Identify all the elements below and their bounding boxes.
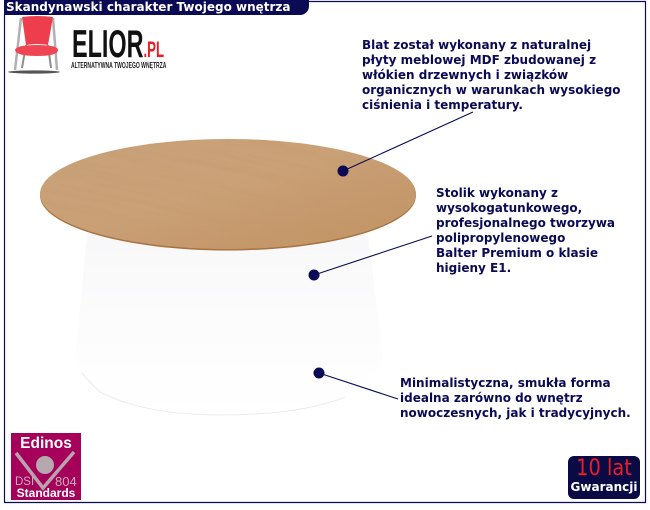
text: form description: Minimalistyczna, smukła forma [400, 376, 611, 390]
badge: 10 year warranty [568, 456, 640, 499]
badge standards label: Standards [17, 486, 75, 500]
badge 804 label: 804 [55, 474, 77, 489]
badge DSI label: DSI [15, 476, 34, 488]
text: table top description [362, 38, 621, 112]
text: table top description: Blat został wykonany z naturalnej [362, 38, 591, 52]
text: base description: Balter Premium o klasie [436, 246, 598, 260]
text: form description: idealna zarówno do wnętrz [400, 391, 583, 405]
product: round table [40, 112, 474, 416]
table top [40, 139, 416, 250]
logo: wordmark [71, 23, 166, 70]
text: base description [436, 186, 615, 275]
text: base description: wysokogatunkowego, [436, 201, 582, 215]
badge chevron and circle [14, 450, 76, 491]
callout line 1 [338, 112, 473, 176]
text: form description [400, 376, 631, 420]
logo name: ELIOR.PL [72, 23, 164, 66]
badge: Edinos standards [11, 433, 81, 500]
callout line 2 [308, 236, 432, 280]
warranty label: Gwarancji [571, 480, 637, 494]
logo: red chair icon [8, 16, 60, 74]
text: form description: nowoczesnych, jak i tradycyjnych. [400, 406, 631, 420]
text: table top description: organicznych w warunkach wysokiego [362, 83, 621, 97]
title banner: Skandynawski charakter Twojego wnętrza [6, 0, 291, 14]
text: table top description: włókien drzewnych i związków [362, 68, 568, 82]
text: base description: higieny E1. [436, 261, 511, 275]
text: base description: polipropylenowego [436, 231, 565, 245]
badge name: Edinos [20, 435, 72, 452]
text: table top description: ciśnienia i temperatury. [362, 98, 523, 112]
text: table top description: płyty meblowej MDF zbudowanej z [362, 53, 596, 67]
callout line 3 [314, 368, 398, 399]
logo tagline: ALTERNATYWNA TWOJEGO WNĘTRZA [71, 61, 166, 70]
text: base description: profesjonalnego tworzywa [436, 216, 615, 230]
warranty years: 10 lat [576, 456, 632, 481]
text: base description: Stolik wykonany z [436, 186, 558, 200]
table base [75, 235, 383, 415]
